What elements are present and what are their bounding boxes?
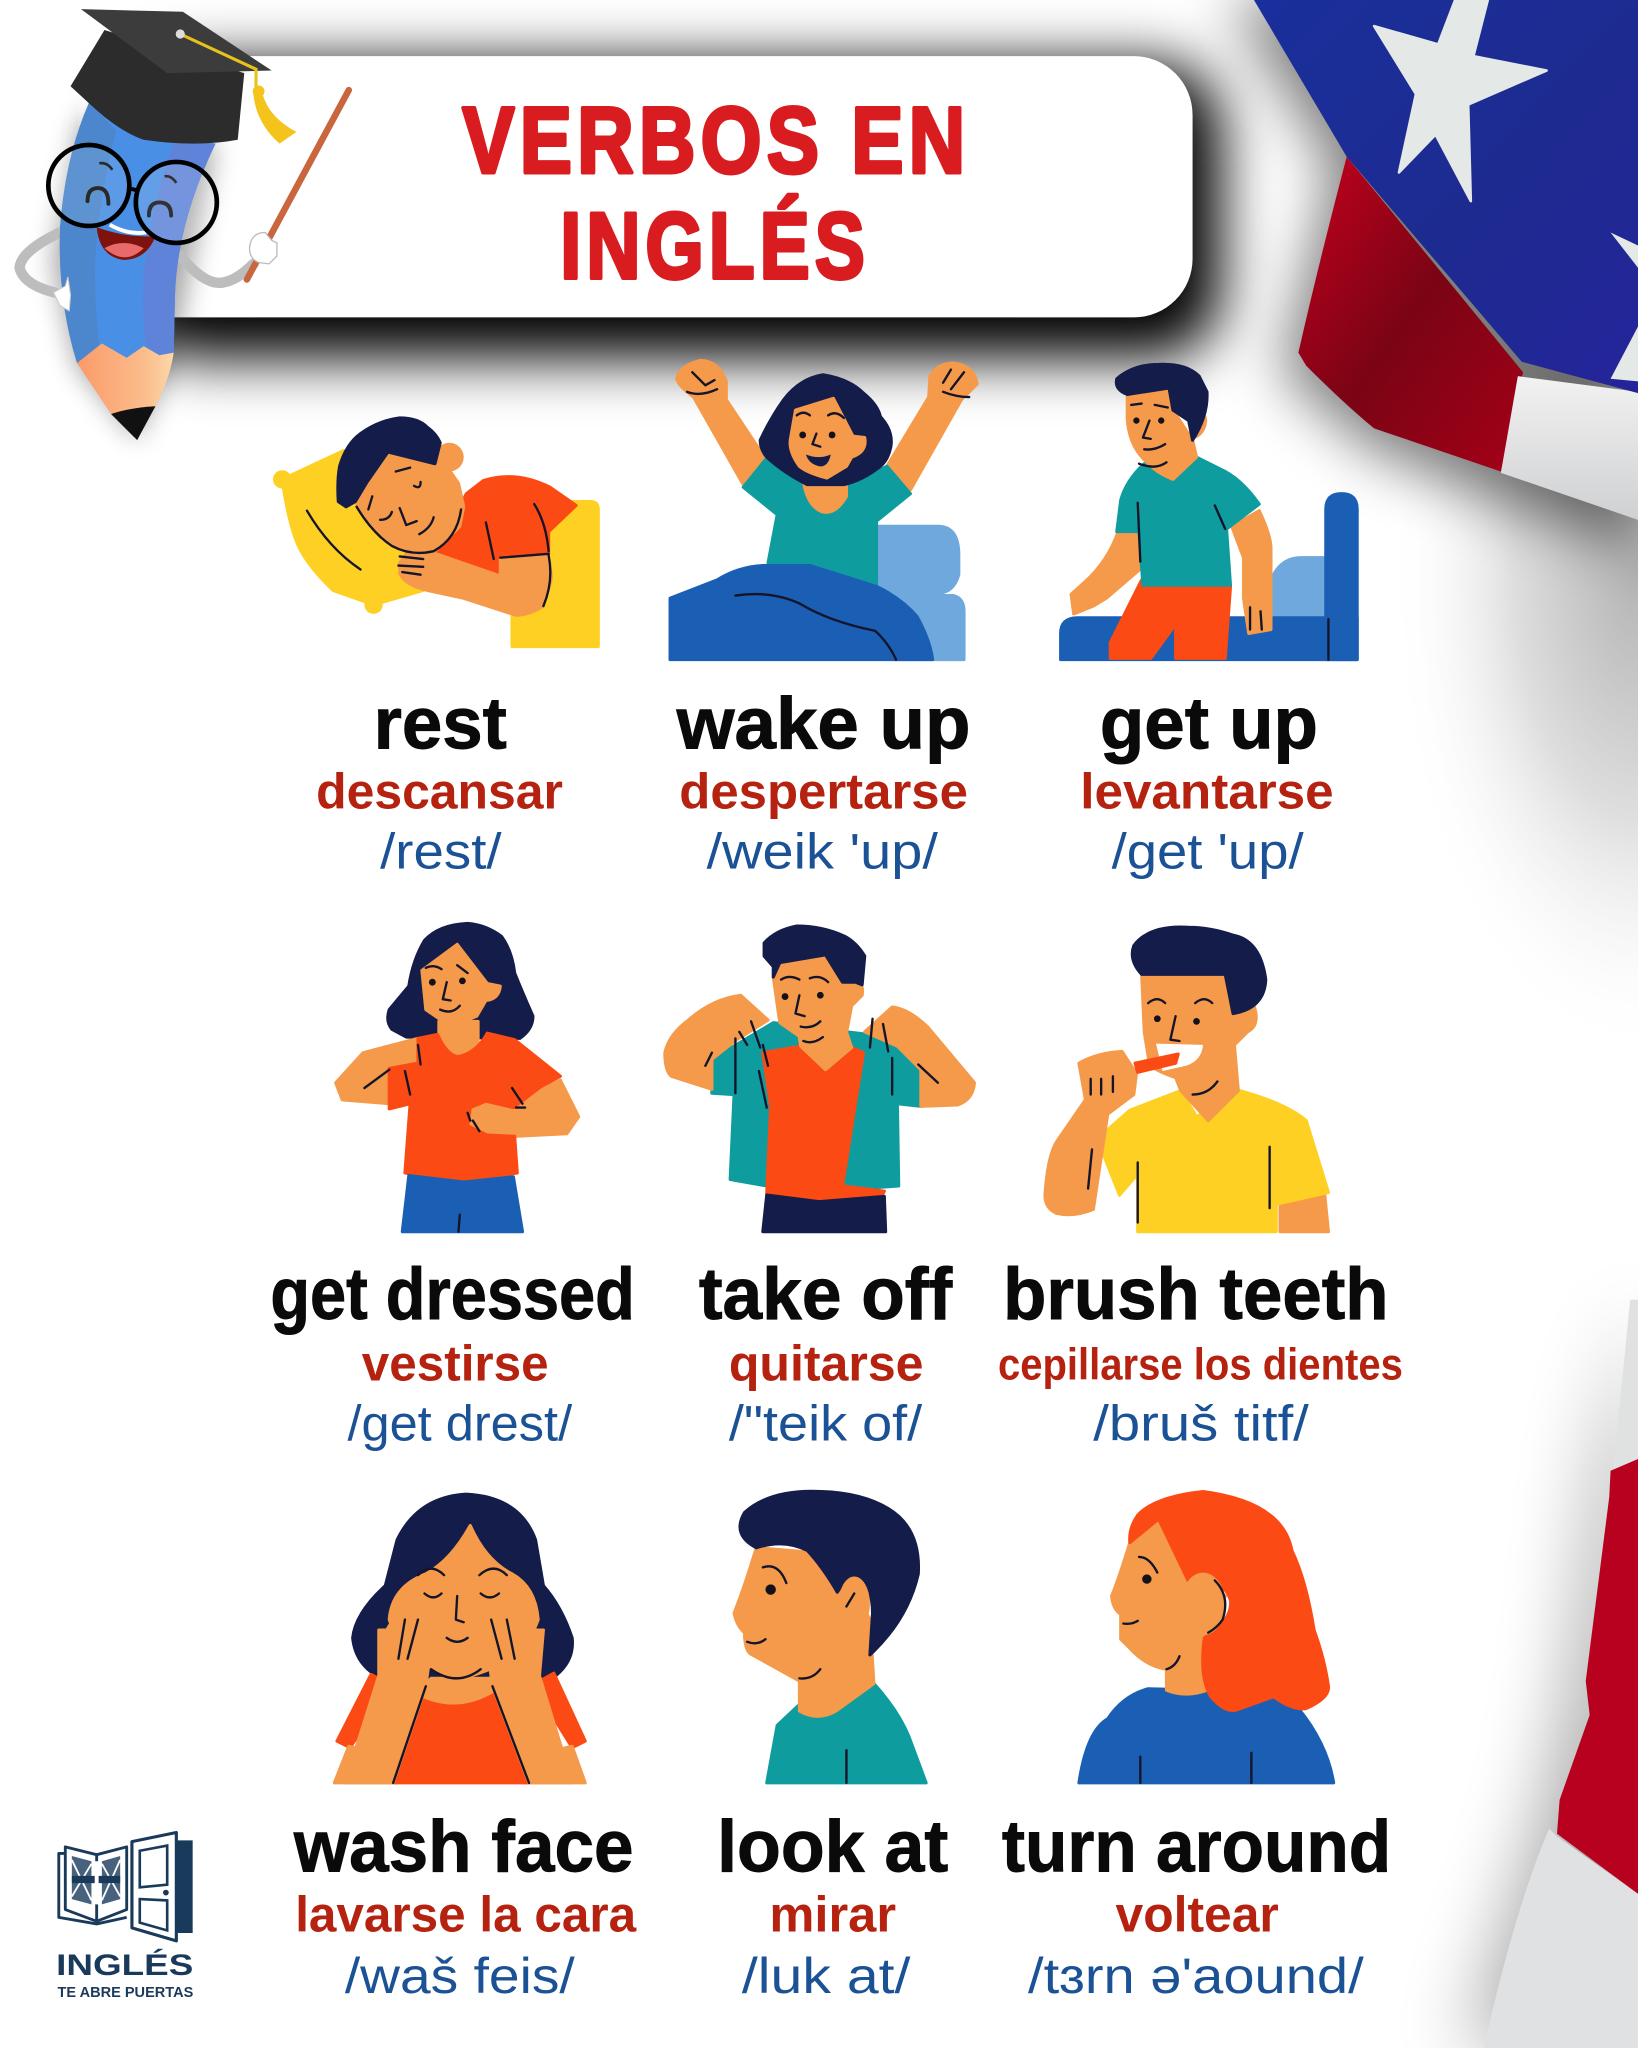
word: turn around	[1002, 1807, 1391, 1888]
translation: lavarse la cara	[295, 1887, 637, 1943]
word: wake up	[676, 683, 971, 764]
card: get up	[1061, 364, 1357, 880]
flag shadows	[1228, 0, 1638, 2048]
translation: mirar	[769, 1887, 896, 1943]
illustration: man getting up	[1061, 364, 1357, 660]
word: wash face	[293, 1807, 634, 1888]
flag red lower	[1557, 1459, 1638, 1894]
card: get dressed	[270, 923, 635, 1452]
word: rest	[374, 683, 507, 764]
title banner	[78, 56, 1193, 317]
flag blue canton	[1254, 0, 1638, 393]
pencil wood	[77, 344, 174, 414]
translation: voltear	[1116, 1887, 1279, 1943]
word: get dressed	[270, 1254, 635, 1335]
pronunciation: /get drest/	[347, 1396, 572, 1452]
card: rest	[273, 418, 598, 880]
pronunciation: /tɜrn əʹaound/	[1028, 1948, 1364, 2004]
word: take off	[699, 1254, 953, 1335]
illustration: man brushing teeth	[1045, 927, 1328, 1232]
glasses	[48, 145, 129, 226]
flag white bottom	[1484, 1829, 1638, 2048]
logo title: INGLÉS	[56, 1948, 193, 1982]
illustration: sleeping man	[273, 418, 598, 647]
pronunciation: /bruš titf/	[1093, 1396, 1309, 1452]
pronunciation: /get ʹup/	[1112, 824, 1304, 880]
card: wake up	[670, 360, 977, 880]
translation: cepillarse los dientes	[998, 1340, 1403, 1389]
arm right	[180, 256, 253, 283]
illustration: woman in profile	[1079, 1492, 1334, 1783]
logo subtitle: TE ABRE PUERTAS	[57, 1985, 194, 2001]
arm left	[20, 232, 60, 293]
pencil body	[60, 103, 216, 363]
pronunciation: /weik ʹup/	[707, 824, 938, 880]
card: look at	[717, 1491, 948, 2004]
flag star right lower	[1611, 327, 1638, 381]
flag star large	[1374, 0, 1547, 201]
translation: descansar	[316, 763, 563, 819]
pencil lead	[111, 406, 155, 440]
pencil shadow	[52, 118, 216, 440]
eyes	[88, 188, 108, 204]
illustration: woman waking up	[670, 360, 977, 660]
flag white top	[1613, 1300, 1638, 1471]
title: INGLÉS	[560, 193, 870, 298]
logo: Inglés te abre puertas	[56, 1832, 194, 2001]
illustration: man in profile	[734, 1491, 926, 1783]
word: look at	[717, 1807, 948, 1888]
banner shadow	[131, 63, 1221, 358]
translation: despertarse	[679, 763, 968, 819]
illustration: woman dressing	[336, 923, 579, 1232]
pronunciation: /waš feis/	[345, 1948, 575, 2004]
flag star right upper	[1611, 232, 1638, 268]
hand left	[54, 277, 71, 311]
card: take off	[665, 926, 974, 1452]
card: wash face	[293, 1494, 637, 2004]
flag red stripe	[1298, 157, 1523, 472]
word: get up	[1100, 683, 1318, 764]
card: turn around	[1002, 1492, 1391, 2004]
translation: levantarse	[1080, 763, 1334, 819]
tassel	[253, 86, 265, 97]
illustration: woman washing face	[334, 1494, 585, 1783]
flag white stripe	[1501, 376, 1638, 520]
pronunciation: /luk at/	[742, 1948, 911, 2004]
pronunciation: /rest/	[380, 824, 502, 880]
translation: vestirse	[362, 1336, 549, 1392]
pointer stick	[247, 90, 349, 280]
title: VERBOS EN	[462, 87, 971, 192]
graduation cap	[71, 30, 244, 144]
flag: bottom right corner	[1484, 1300, 1638, 2048]
flag: top right corner	[1254, 0, 1638, 520]
hand right	[249, 232, 277, 264]
mouth	[97, 227, 155, 260]
translation: quitarse	[729, 1336, 923, 1392]
mascot: pencil with cap	[20, 9, 349, 440]
illustration: man taking off shirt	[665, 926, 974, 1232]
word: brush teeth	[1003, 1254, 1389, 1335]
pronunciation: /ʺteik of/	[729, 1396, 922, 1452]
icon: open door	[132, 1832, 193, 1941]
title	[462, 87, 971, 298]
icon: open book	[59, 1847, 127, 1924]
card: brush teeth	[998, 927, 1403, 1452]
